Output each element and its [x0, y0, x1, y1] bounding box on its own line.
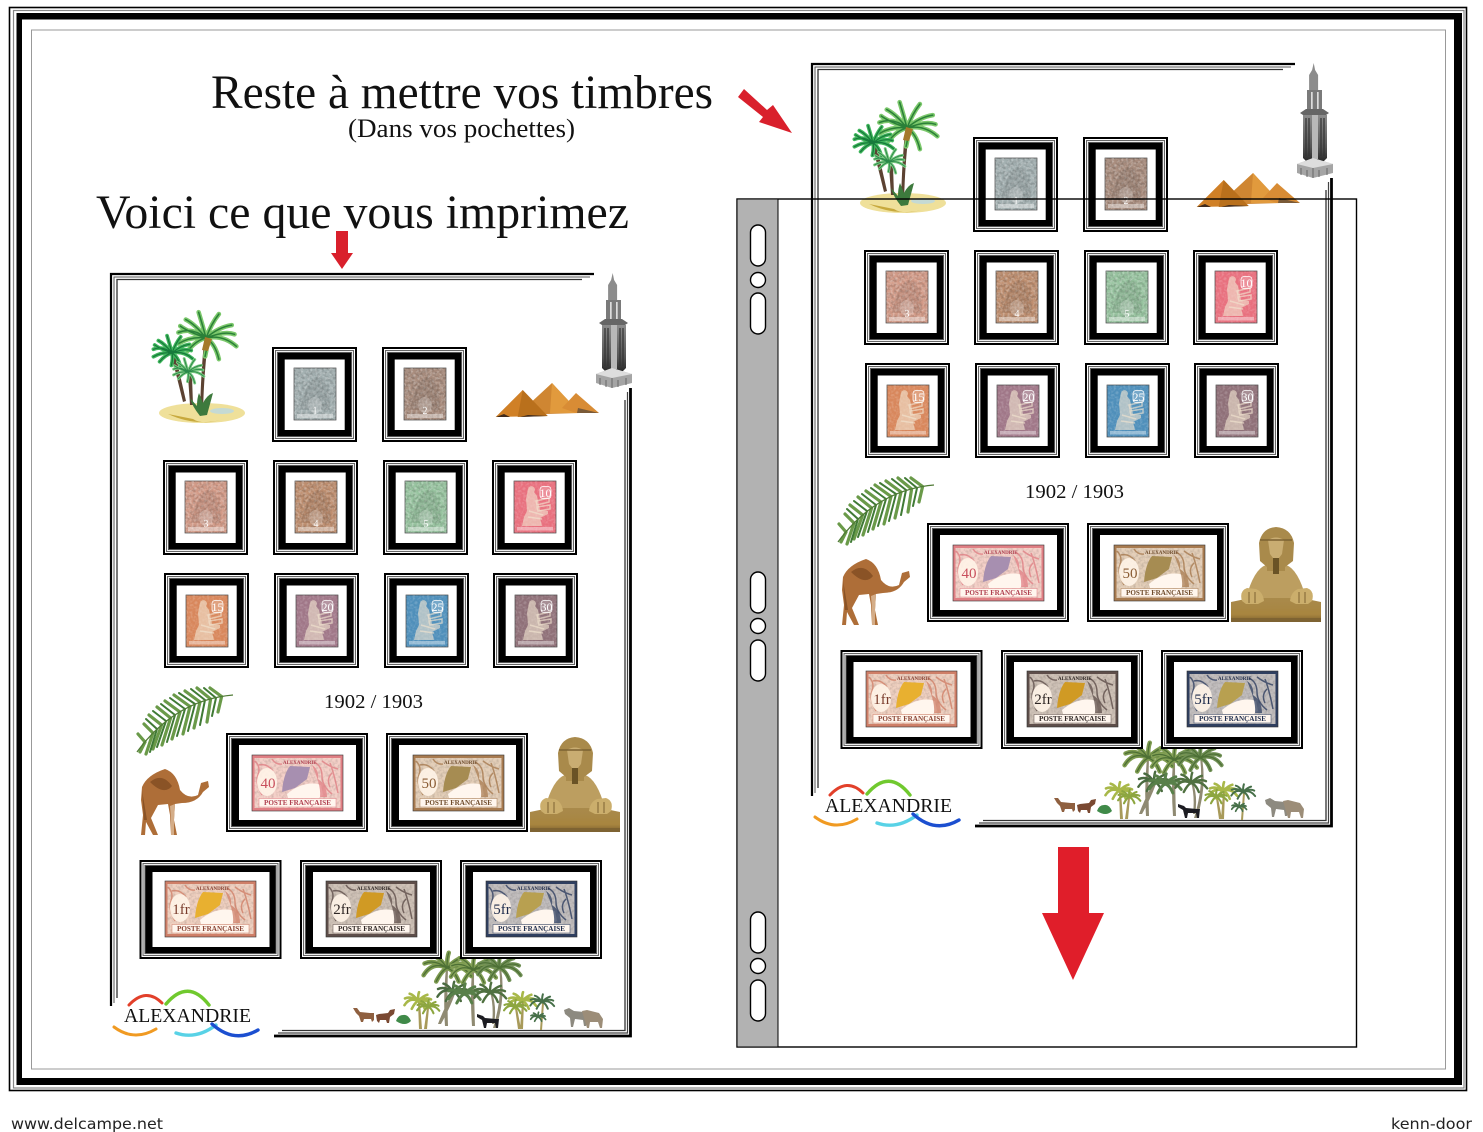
stamps: 40c and 50c: POSTE FRANÇAISE: [425, 799, 492, 807]
stamps: 40c and 50c: 40: [962, 566, 976, 582]
stamp row 3: [865, 363, 1279, 458]
stamps: 1fr 2fr 5fr: [840, 650, 1303, 749]
logo: alexandrie: [114, 991, 258, 1036]
subtitle: dans vos pochettes: (Dans vos pochettes): [348, 114, 575, 143]
stamp row 1: 2: [1124, 196, 1128, 207]
stamp row 2: 10: [540, 486, 552, 500]
stamps: 1fr 2fr 5fr: ALEXANDRIE: [1058, 677, 1092, 682]
stamps: 1fr 2fr 5fr: 2fr: [1034, 692, 1052, 708]
stamps: 1fr 2fr 5fr: 2fr: [333, 902, 351, 918]
stamp row 2: 5: [424, 519, 428, 530]
stamp row 1: [973, 137, 1168, 232]
arrow: small down red: [331, 231, 353, 269]
stamp row 3: 15: [212, 600, 224, 614]
pocket perforated strip: [737, 199, 778, 1047]
stamps: 1fr 2fr 5fr: ALEXANDRIE: [1218, 677, 1252, 682]
stamp row 1: 1: [1014, 196, 1018, 207]
stamps: 40c and 50c: POSTE FRANÇAISE: [1126, 589, 1193, 597]
stamp row 2: 3: [904, 309, 910, 320]
album page: in pocket: [812, 63, 1333, 826]
stamps: 40c and 50c: 50: [1122, 566, 1138, 582]
stamps: 1fr 2fr 5fr: ALEXANDRIE: [517, 887, 551, 892]
stamps: 1fr 2fr 5fr: POSTE FRANÇAISE: [878, 715, 945, 723]
stamp row 2: 3: [204, 519, 208, 530]
illustration: oasis with animals: [353, 953, 603, 1030]
illustration: sphinx: [530, 737, 620, 832]
logo: alexandrie: ALEXANDRIE: [825, 795, 952, 817]
album border lines: [111, 274, 630, 1036]
logo: alexandrie: ALEXANDRIE: [124, 1005, 251, 1027]
stamp row 1: [272, 347, 467, 442]
stamp row 3: 30: [540, 600, 552, 614]
stamp row 1: 2: [422, 406, 428, 417]
punch holes group 1: [750, 225, 766, 334]
stamp row 3: 25: [1132, 390, 1144, 404]
stamps: 40c and 50c: [226, 733, 528, 832]
stamps: 1fr 2fr 5fr: POSTE FRANÇAISE: [1199, 715, 1266, 723]
stamps: 1fr 2fr 5fr: POSTE FRANÇAISE: [498, 925, 565, 933]
album page: printed: [111, 273, 632, 1036]
stamps: 1fr 2fr 5fr: 1fr: [873, 692, 891, 708]
stamps: 40c and 50c: ALEXANDRIE: [1145, 551, 1179, 556]
stamps: 1fr 2fr 5fr: ALEXANDRIE: [897, 677, 931, 682]
punch holes group 2: [750, 572, 766, 681]
illustration: camel: [141, 769, 209, 835]
illustration: sphinx: [1231, 527, 1321, 622]
stamps: 1fr 2fr 5fr: 1fr: [172, 902, 190, 918]
illustration: pyramids: [1197, 173, 1300, 207]
stamps: 1fr 2fr 5fr: ALEXANDRIE: [357, 887, 391, 892]
stamps: 1fr 2fr 5fr: POSTE FRANÇAISE: [177, 925, 244, 933]
stamps: 1fr 2fr 5fr: 5fr: [1194, 692, 1212, 708]
stamp row 3: 20: [322, 600, 334, 614]
stamps: 1fr 2fr 5fr: ALEXANDRIE: [196, 887, 230, 892]
illustration: oasis with animals: [1054, 743, 1304, 820]
year label: 1902 / 1903: [1025, 481, 1124, 503]
stamp row 2: 5: [1124, 309, 1130, 320]
illustration: camel: [842, 559, 910, 625]
stamp row 2: 10: [1240, 276, 1252, 290]
illustration: lighthouse of alexandria: [596, 273, 632, 388]
stamps: 40c and 50c: POSTE FRANÇAISE: [264, 799, 331, 807]
pocket outline: [737, 199, 1356, 1047]
stamps: 1fr 2fr 5fr: [140, 860, 602, 959]
illustration: pyramids: [496, 383, 599, 417]
stamp row 3: 25: [432, 600, 444, 614]
transparent pocket sheet: [737, 199, 1356, 1047]
year label: 1902 / 1903: [324, 691, 423, 713]
arrow: large down red: [1042, 847, 1104, 980]
album border lines: [812, 64, 1332, 826]
stamp row 3: 15: [912, 390, 924, 404]
stamp row 2: [163, 460, 577, 555]
stamps: 1fr 2fr 5fr: POSTE FRANÇAISE: [338, 925, 405, 933]
illustration: lighthouse of alexandria: [1297, 63, 1333, 178]
arrow: diagonal red: [738, 89, 792, 133]
stamp row 3: 20: [1022, 390, 1034, 404]
stamps: 40c and 50c: ALEXANDRIE: [444, 761, 478, 766]
stamps: 40c and 50c: ALEXANDRIE: [984, 551, 1018, 556]
title: reste à mettre vos timbres: Reste à mettre vos timbres: [211, 66, 713, 119]
stamps: 40c and 50c: [927, 523, 1229, 622]
stamp row 3: 30: [1242, 390, 1254, 404]
stamps: 40c and 50c: POSTE FRANÇAISE: [965, 589, 1032, 597]
stamp row 2: 4: [1014, 309, 1020, 320]
stamps: 40c and 50c: 50: [422, 776, 436, 792]
illustration: palm oasis: [153, 312, 245, 423]
heading: voici ce que vous imprimez: Voici ce que vous imprimez: [96, 186, 629, 239]
stamps: 1fr 2fr 5fr: 5fr: [493, 902, 511, 918]
punch holes group 3: [750, 912, 766, 1021]
stamps: 1fr 2fr 5fr: POSTE FRANÇAISE: [1039, 715, 1106, 723]
stamps: 40c and 50c: ALEXANDRIE: [283, 761, 317, 766]
stamp row 2: [864, 250, 1278, 345]
illustration: palm leaf: [838, 478, 934, 544]
illustration: palm oasis: [854, 102, 946, 213]
illustration: palm leaf: [137, 688, 233, 754]
stamps: 40c and 50c: 40: [260, 776, 276, 792]
stamp row 1: 1: [312, 406, 318, 417]
stamp row 3: [164, 573, 578, 668]
logo: alexandrie: [815, 781, 959, 826]
stamp row 2: 4: [314, 519, 318, 530]
